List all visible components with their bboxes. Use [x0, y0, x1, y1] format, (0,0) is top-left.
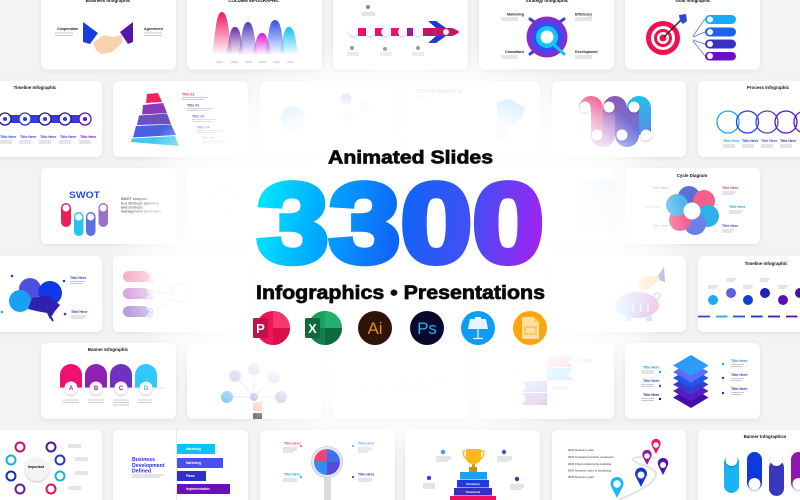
card: layered stack: Title Here: [643, 393, 659, 397]
card: arrows: [479, 343, 614, 419]
card: road map pins: [552, 430, 686, 500]
card: column infographic: [187, 0, 322, 70]
card: magnifier puzzle: Title Here: [284, 472, 300, 476]
card: cycle diagram: Title Here: [643, 205, 659, 209]
card: strategy infographic: Consultant: [505, 50, 525, 54]
arches: A: [69, 386, 74, 392]
card: goal infographic: [625, 0, 760, 70]
card: banner arches: [41, 343, 176, 419]
stack layers: [673, 355, 708, 408]
swot description: is a strategic planning: [121, 202, 159, 206]
card: handshake infographic: Cooperation: [57, 27, 78, 31]
timeline bars: [698, 316, 710, 318]
card: timeline beads: Title Here: [80, 135, 96, 139]
card: timeline beads: Title Here: [20, 135, 36, 139]
card: timeline beads: Title Here: [60, 135, 76, 139]
icon: Excel: [305, 311, 342, 345]
road: [618, 457, 656, 500]
card: pyramid: [113, 81, 248, 157]
card: cycle diagram: Title Here: [652, 186, 668, 190]
card: piggy bank: [552, 256, 686, 332]
card: strategy infographic: Efficiency: [575, 12, 592, 16]
card: magnifier puzzle: Title Here: [358, 442, 374, 446]
podium: Summary: [466, 482, 480, 486]
bell chart: [212, 12, 298, 55]
swot heading: SWOT: [69, 190, 101, 200]
card: sphere hub: [0, 430, 102, 500]
heading: Development: [132, 463, 165, 469]
year list: 2021 Business plan: [568, 448, 594, 452]
card: pyramid: Title 04: [197, 126, 209, 130]
hub sphere: [25, 457, 49, 481]
year list: 2023 Client relationship building: [568, 462, 611, 466]
bars: Marketing: [186, 461, 201, 465]
heading: Business: [132, 457, 155, 463]
ring nodes: [6, 442, 64, 494]
icon: Illustrator: Ai: [367, 319, 383, 338]
card: trophy podium: [405, 430, 540, 500]
legend: [216, 61, 294, 63]
pins: [611, 439, 668, 498]
icon: Illustrator: [358, 311, 392, 345]
year list: 2025 Business plan: [568, 475, 594, 479]
goal pills: [693, 15, 736, 60]
heading: Defined: [132, 468, 151, 474]
rocket: [423, 21, 459, 43]
timeline icons: [708, 288, 800, 305]
card: numbered pills: 1: [146, 270, 153, 285]
card: faded bubbles: [260, 81, 395, 157]
card: faded waves: [333, 343, 468, 419]
card: business development bars: [113, 430, 248, 500]
card: handshake infographic: Agreement: [144, 27, 164, 31]
card: timeline beads: Title Here: [40, 135, 56, 139]
card: pyramid: Title 01: [182, 92, 194, 96]
rings: [717, 111, 800, 133]
card: banner pills: Banner Infographics: [744, 434, 787, 439]
card: faded ring: [187, 168, 322, 244]
trophy: [463, 449, 484, 472]
cycle petals: [666, 186, 719, 235]
card: cycle diagram: Title Here: [652, 224, 668, 228]
handshake icon: [83, 22, 133, 54]
card: strategy infographic: Marketing: [507, 12, 524, 16]
card: south america map: [405, 81, 540, 157]
card: magnifier puzzle: Title Here: [284, 442, 300, 446]
bars: [176, 430, 230, 500]
card: pyramid: Title 03: [192, 114, 204, 118]
arches: D: [144, 386, 149, 392]
year list: 2022 Company location expansion: [568, 455, 614, 459]
card: brain: Title Here: [70, 276, 86, 280]
icon: Excel: X: [308, 321, 317, 336]
card: numbered pills: 3: [146, 305, 153, 320]
icon: Photoshop: Ps: [417, 319, 437, 338]
card: wave ribbon: [552, 81, 686, 157]
pyramid chart: [131, 93, 179, 146]
year list: 2024 Increase sales & marketing: [568, 468, 611, 472]
icon: PowerPoint: P: [256, 321, 265, 336]
card: south america map: SOUTH AMERICA: [416, 89, 462, 95]
card: cycle diagram: Title Here: [722, 224, 738, 228]
card: pyramid: Title 05: [202, 136, 214, 140]
heading: animated slides: Animated Slides: [328, 148, 493, 168]
dartboard: [646, 14, 687, 55]
card: banner arches: Banner Infographic: [88, 347, 129, 352]
card: sphere hub: Important: [28, 465, 45, 469]
card: timeline beads: Timeline Infographic: [14, 85, 57, 90]
card: layered stack: Title Here: [731, 387, 747, 391]
icon: Keynote: [461, 311, 495, 345]
card: banner pills: [698, 430, 800, 500]
icon: Photoshop: [410, 311, 444, 345]
icon: PowerPoint: [253, 311, 290, 345]
card: process rings: [698, 81, 800, 157]
card: handshake infographic: [41, 0, 176, 70]
card: brain: Title Here: [71, 310, 87, 314]
card: cycle diagram: [625, 168, 760, 244]
card: radial hand: [187, 343, 322, 419]
podium: Teamwork: [466, 490, 481, 494]
card: magnifier puzzle: Title Here: [358, 472, 374, 476]
vertical pills: [724, 452, 800, 496]
card: cycle diagram: Title Here: [722, 186, 738, 190]
card: timeline dots: Timeline Infographic: [745, 261, 788, 266]
podium: [450, 472, 496, 500]
bars: Plans: [186, 474, 195, 478]
card: timeline beads: [0, 81, 102, 157]
card: process rings: Title Here: [780, 139, 796, 143]
brain: [9, 278, 62, 321]
bars: Marketing: [186, 447, 201, 451]
card: numbered pills: 2: [146, 287, 153, 302]
rocket path: [349, 28, 422, 36]
piggy: [615, 267, 665, 321]
card: numbered pills: [113, 256, 248, 332]
bars: Implementation: [186, 487, 210, 491]
swot description: SWOT analysis: [121, 197, 147, 201]
card: magnifier puzzle: [260, 430, 395, 500]
card: process rings: Title Here: [723, 139, 739, 143]
card: process rings: Title Here: [742, 139, 758, 143]
card: strategy infographic: [479, 0, 614, 70]
big number 3300: 3300: [257, 160, 544, 286]
arches: C: [119, 386, 124, 392]
strategy target: [526, 16, 568, 58]
arches: [52, 364, 165, 394]
icon: Google Slides: [513, 311, 547, 345]
swot description: management technique: [121, 210, 161, 214]
card: timeline dots: [698, 256, 800, 332]
subheading: Infographics • Presentations: [256, 283, 545, 304]
swot pills: [61, 203, 108, 236]
card: strategy infographic: Development: [575, 50, 598, 54]
card: pyramid: Title 02: [187, 104, 199, 108]
card: rocket infographic: [333, 0, 468, 70]
card: layered stack: [625, 343, 760, 419]
bead chain: [0, 113, 91, 125]
arches: B: [94, 386, 99, 392]
card: layered stack: Title Here: [643, 379, 659, 383]
card: cycle diagram: Title Here: [729, 205, 745, 209]
card: swot: [41, 168, 176, 244]
card: layered stack: Title Here: [731, 373, 747, 377]
card: timeline beads: Title Here: [0, 135, 16, 139]
card: layered stack: Title Here: [731, 359, 747, 363]
card: brain: [0, 256, 102, 332]
swot description: and strategic: [121, 206, 143, 210]
card: faded table: [479, 168, 614, 244]
card: cycle diagram: Cycle Diagram: [677, 173, 707, 178]
card: process rings: Process Infographic: [747, 85, 790, 90]
magnifier: [312, 446, 342, 500]
card: south america map: MAP: [416, 95, 426, 100]
card: layered stack: Title Here: [643, 366, 659, 370]
ribbon: [585, 102, 645, 141]
card: process rings: Title Here: [761, 139, 777, 143]
